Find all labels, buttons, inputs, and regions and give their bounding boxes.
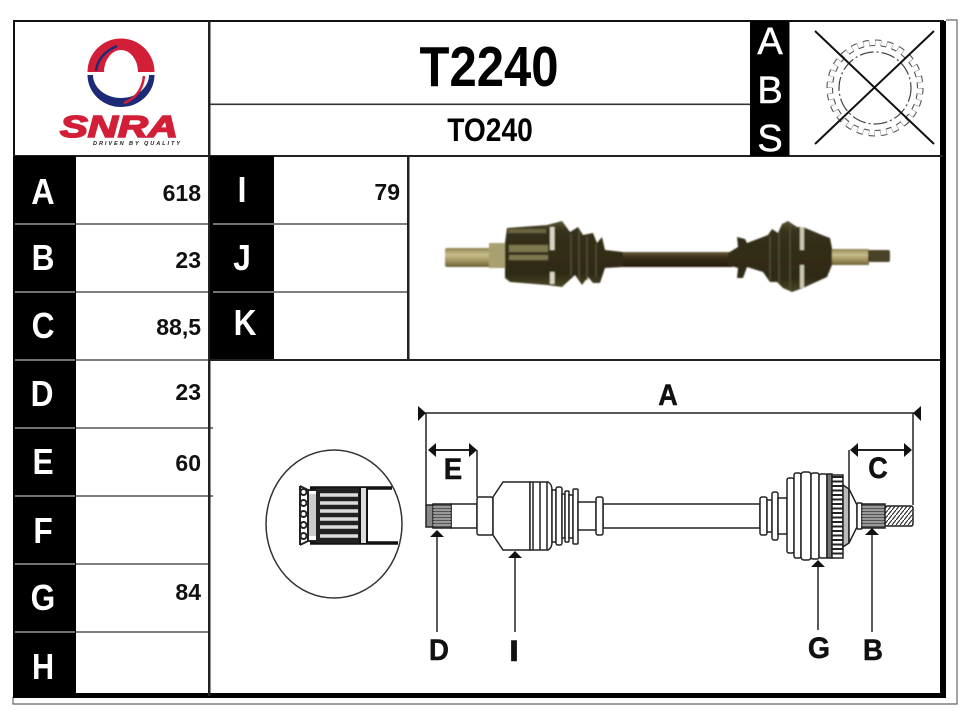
- panel: second dimension labels column: J: [233, 238, 251, 278]
- diagram: dimension letters: B: [863, 634, 883, 667]
- panel: left dimension values column: 84: [175, 579, 201, 605]
- diagram: callout arrows: [430, 528, 879, 632]
- panel: left dimension labels column: [13, 156, 76, 696]
- title: part number: T2240: [420, 36, 558, 99]
- diagram: dimension letters: A: [658, 379, 678, 412]
- diagram: dimension letters: D: [429, 634, 449, 667]
- inset: spline detail in circle: [266, 450, 402, 598]
- panel: ABS label: S: [757, 118, 783, 160]
- panel: left dimension labels column: F: [33, 511, 53, 551]
- panel: second dimension values column: 79: [374, 179, 400, 205]
- diagram: dimension lines: [418, 406, 921, 505]
- panel: brand logo: DRIVEN BY QUALITY: [93, 141, 181, 147]
- panel: left dimension labels column: E: [32, 442, 54, 482]
- diagram: dimension letters: G: [808, 632, 830, 665]
- panel: left dimension values column: 618: [163, 180, 201, 206]
- panel: left dimension values column: 23: [175, 247, 201, 273]
- panel: second dimension labels column: [210, 156, 274, 360]
- panel: left dimension labels column: B: [32, 238, 54, 278]
- panel: second dimension labels column: I: [238, 170, 246, 210]
- diagram: dimension letters: [429, 379, 888, 668]
- diagram: dimension letters: C: [868, 452, 888, 485]
- photo: drive shaft: [445, 221, 890, 292]
- panel: second dimension values column: [210, 156, 941, 361]
- panel: ABS label: [750, 21, 790, 160]
- panel: ABS label: B: [757, 70, 783, 112]
- panel: left dimension labels column: A: [31, 172, 55, 212]
- diagram: dimension letters: E: [444, 453, 462, 486]
- icon: crossed-out ABS ring: [815, 31, 934, 144]
- diagram: drive shaft line drawing: [426, 472, 913, 560]
- panel: left dimension values column: [76, 156, 213, 696]
- header grid: [13, 21, 943, 157]
- subtitle: reference code: TO240: [447, 113, 533, 148]
- panel: left dimension labels column: G: [31, 578, 55, 618]
- panel: second dimension labels column: K: [234, 303, 257, 343]
- panel: brand logo: SNRA: [60, 109, 178, 144]
- panel: left dimension labels column: C: [32, 306, 54, 346]
- panel: left dimension values column: 23: [175, 379, 201, 405]
- panel: left dimension labels column: H: [32, 648, 54, 688]
- panel: brand logo: [60, 38, 181, 147]
- panel: left dimension values column: 60: [175, 450, 201, 476]
- panel: left dimension values column: 88,5: [156, 314, 201, 340]
- diagram: dimension letters: I: [509, 635, 519, 668]
- panel: ABS label: A: [757, 21, 783, 63]
- panel: left dimension labels column: D: [31, 374, 53, 414]
